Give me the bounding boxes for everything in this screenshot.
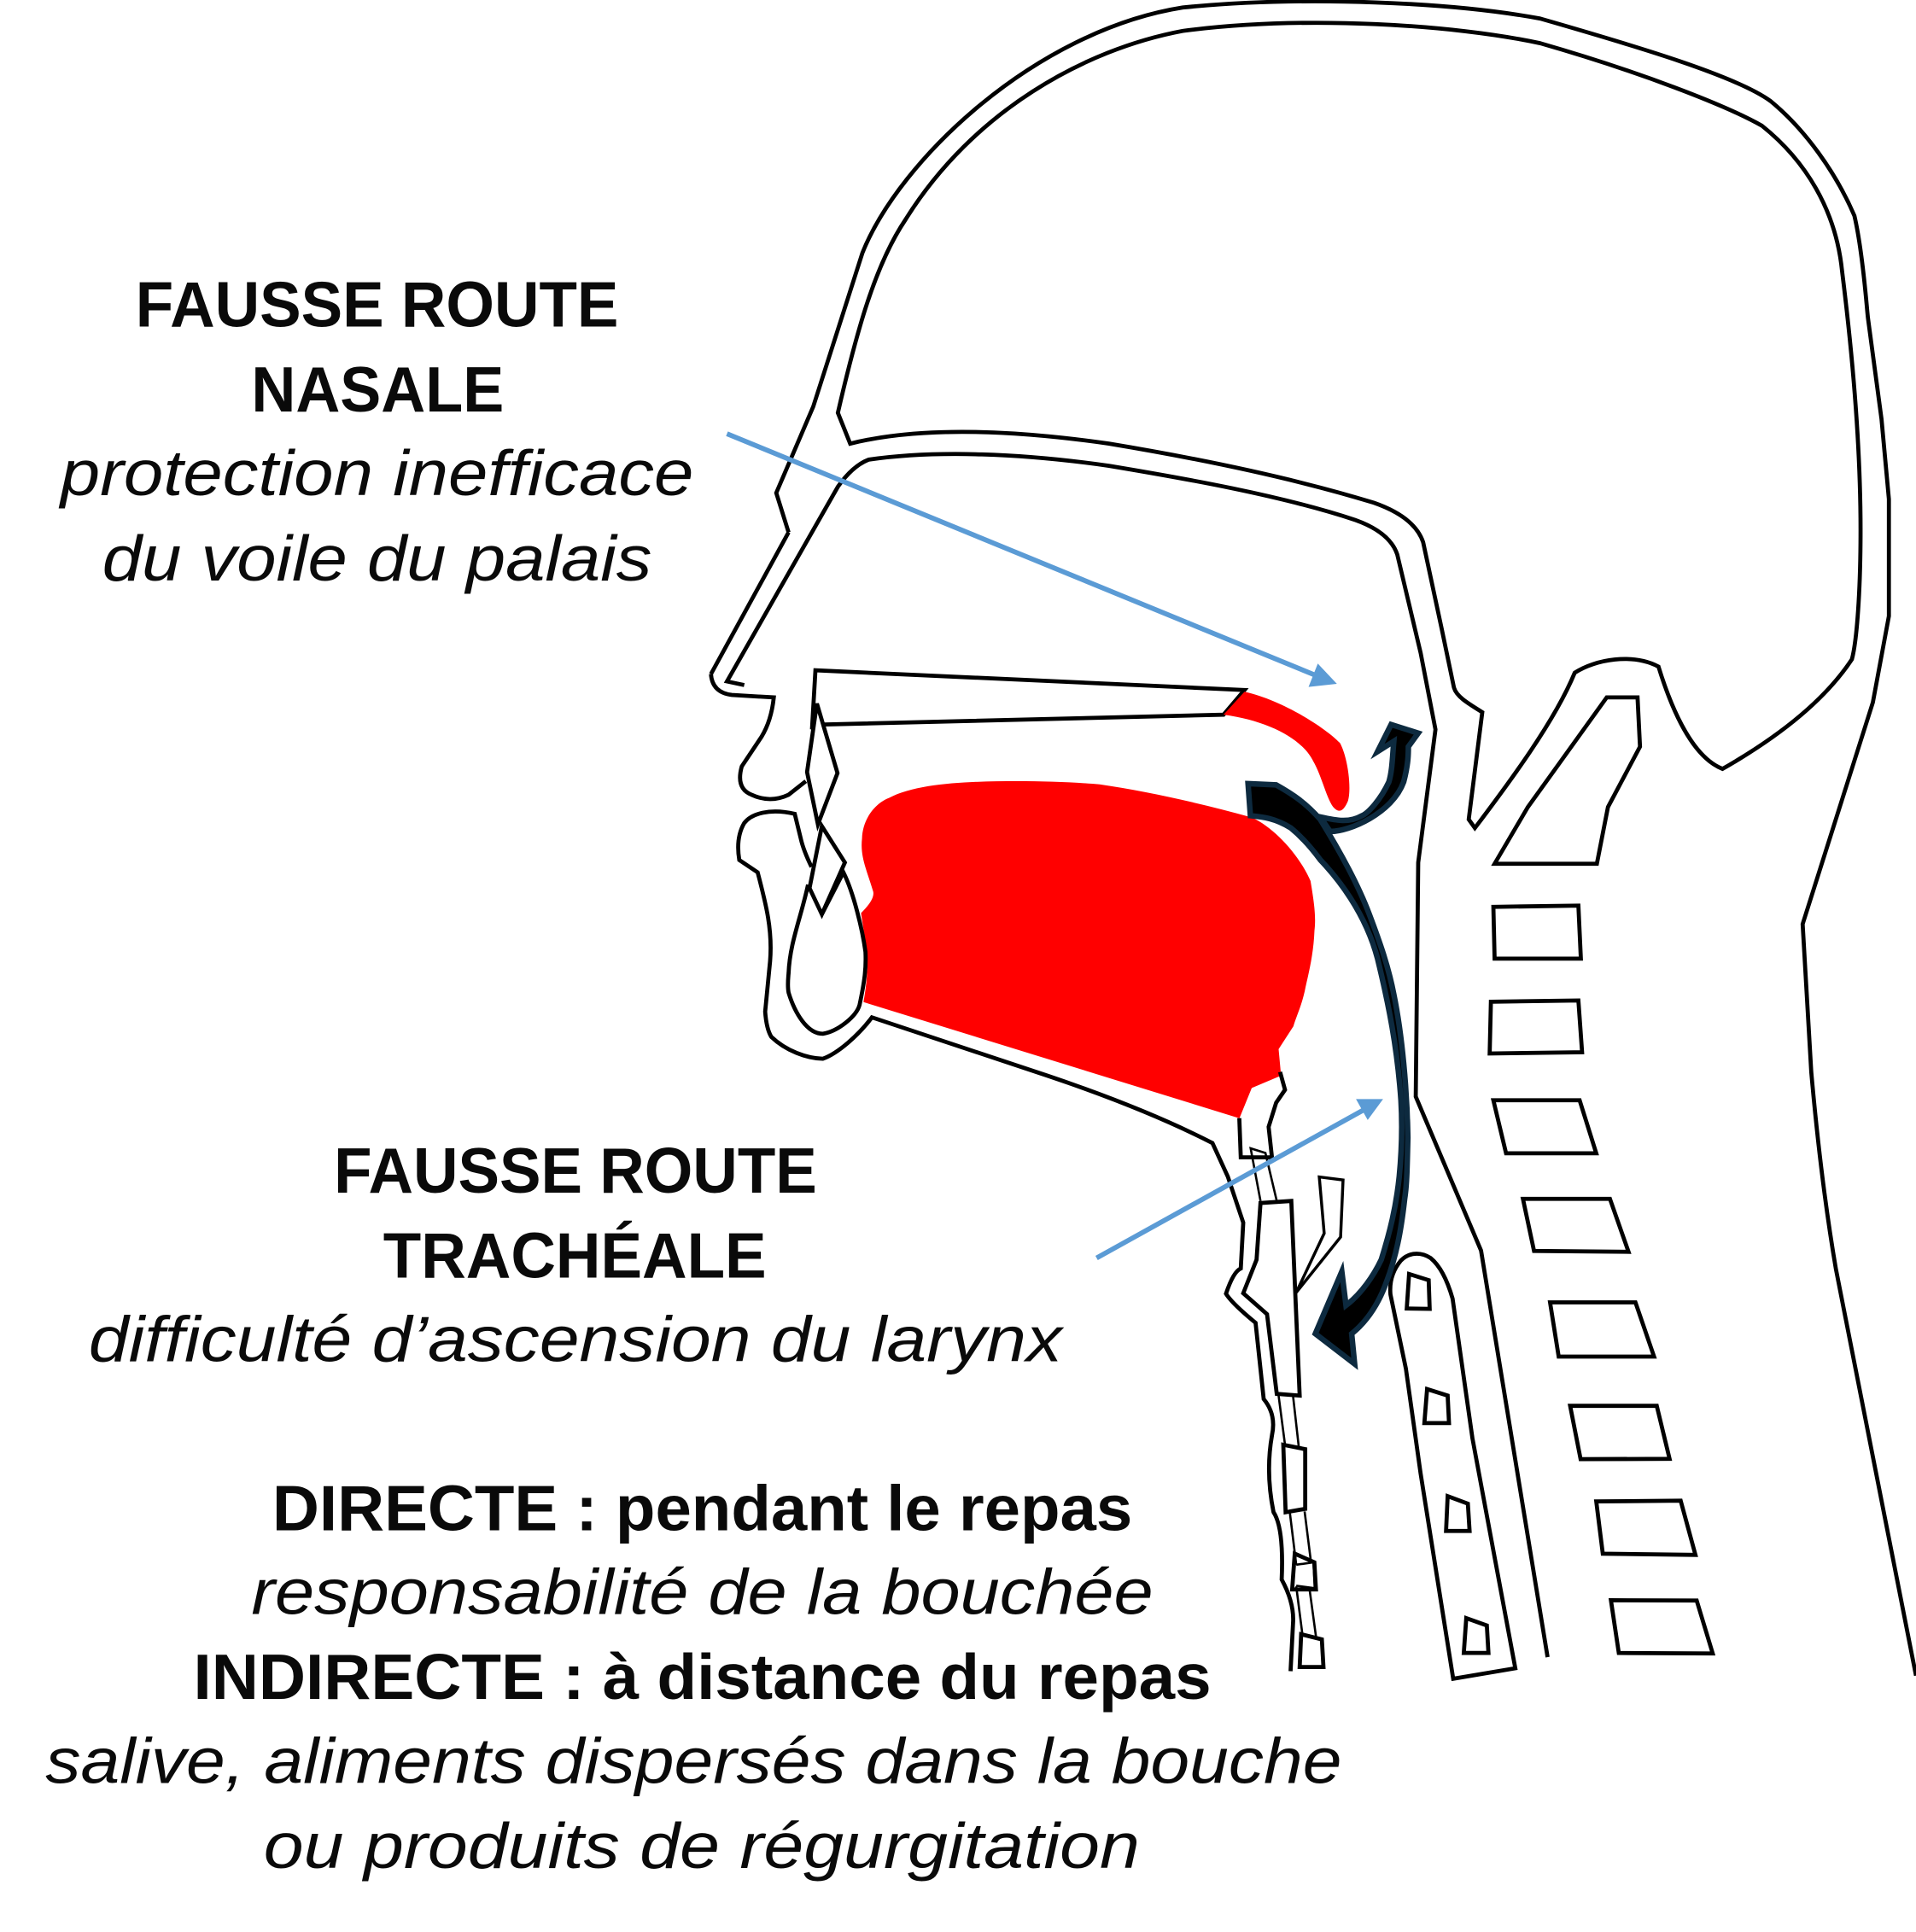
upper incisor (807, 703, 838, 825)
mandible teardrop (788, 873, 866, 1034)
oesophagus band with cartilages (1390, 1253, 1516, 1678)
blue arrow: nasal (727, 434, 1337, 687)
text: direct and indirect false routes: responsabilité de la bouchée (251, 1556, 1154, 1628)
text: direct and indirect false routes (45, 1472, 1342, 1882)
label: tracheal false route: TRACHÉALE (383, 1220, 767, 1292)
skull inner outline (838, 23, 1861, 828)
head outer outline (711, 2, 1916, 1676)
text: direct and indirect false routes: DIRECTE : pendant le repas (272, 1472, 1132, 1544)
label: nasal false route: du voile du palais (102, 522, 651, 594)
small black arrow: towards the nose (1320, 725, 1418, 832)
text: direct and indirect false routes: ou produits de régurgitation (264, 1810, 1140, 1882)
cervical vertebrae (1490, 698, 1713, 1654)
lower incisor (809, 826, 845, 914)
label: nasal false route (58, 269, 693, 594)
label: nasal false route: FAUSSE ROUTE (136, 269, 618, 341)
text: direct and indirect false routes: salive, aliments dispersés dans la bouche (45, 1725, 1342, 1796)
label: tracheal false route (89, 1135, 1065, 1375)
blue arrow: tracheal (1096, 1099, 1383, 1258)
text: direct and indirect false routes: INDIRECTE : à distance du repas (194, 1641, 1212, 1713)
nose and upper lip (711, 674, 806, 799)
label: tracheal false route: difficulté d’ascension du larynx (89, 1304, 1065, 1375)
large black arrow: towards the trachea (1248, 784, 1408, 1364)
label: tracheal false route: FAUSSE ROUTE (334, 1135, 817, 1206)
larynx and trachea (1243, 1148, 1343, 1667)
soft palate in red (1224, 692, 1349, 811)
epiglottis (1239, 1072, 1285, 1158)
hard palate (812, 670, 1245, 729)
lower lip, chin and jaw line (739, 812, 1294, 1672)
label: nasal false route: protection inefficace (58, 437, 693, 509)
nasal cavity and pharynx wall (727, 454, 1548, 1657)
tongue in red (861, 781, 1315, 1118)
label: nasal false route: NASALE (251, 353, 504, 425)
